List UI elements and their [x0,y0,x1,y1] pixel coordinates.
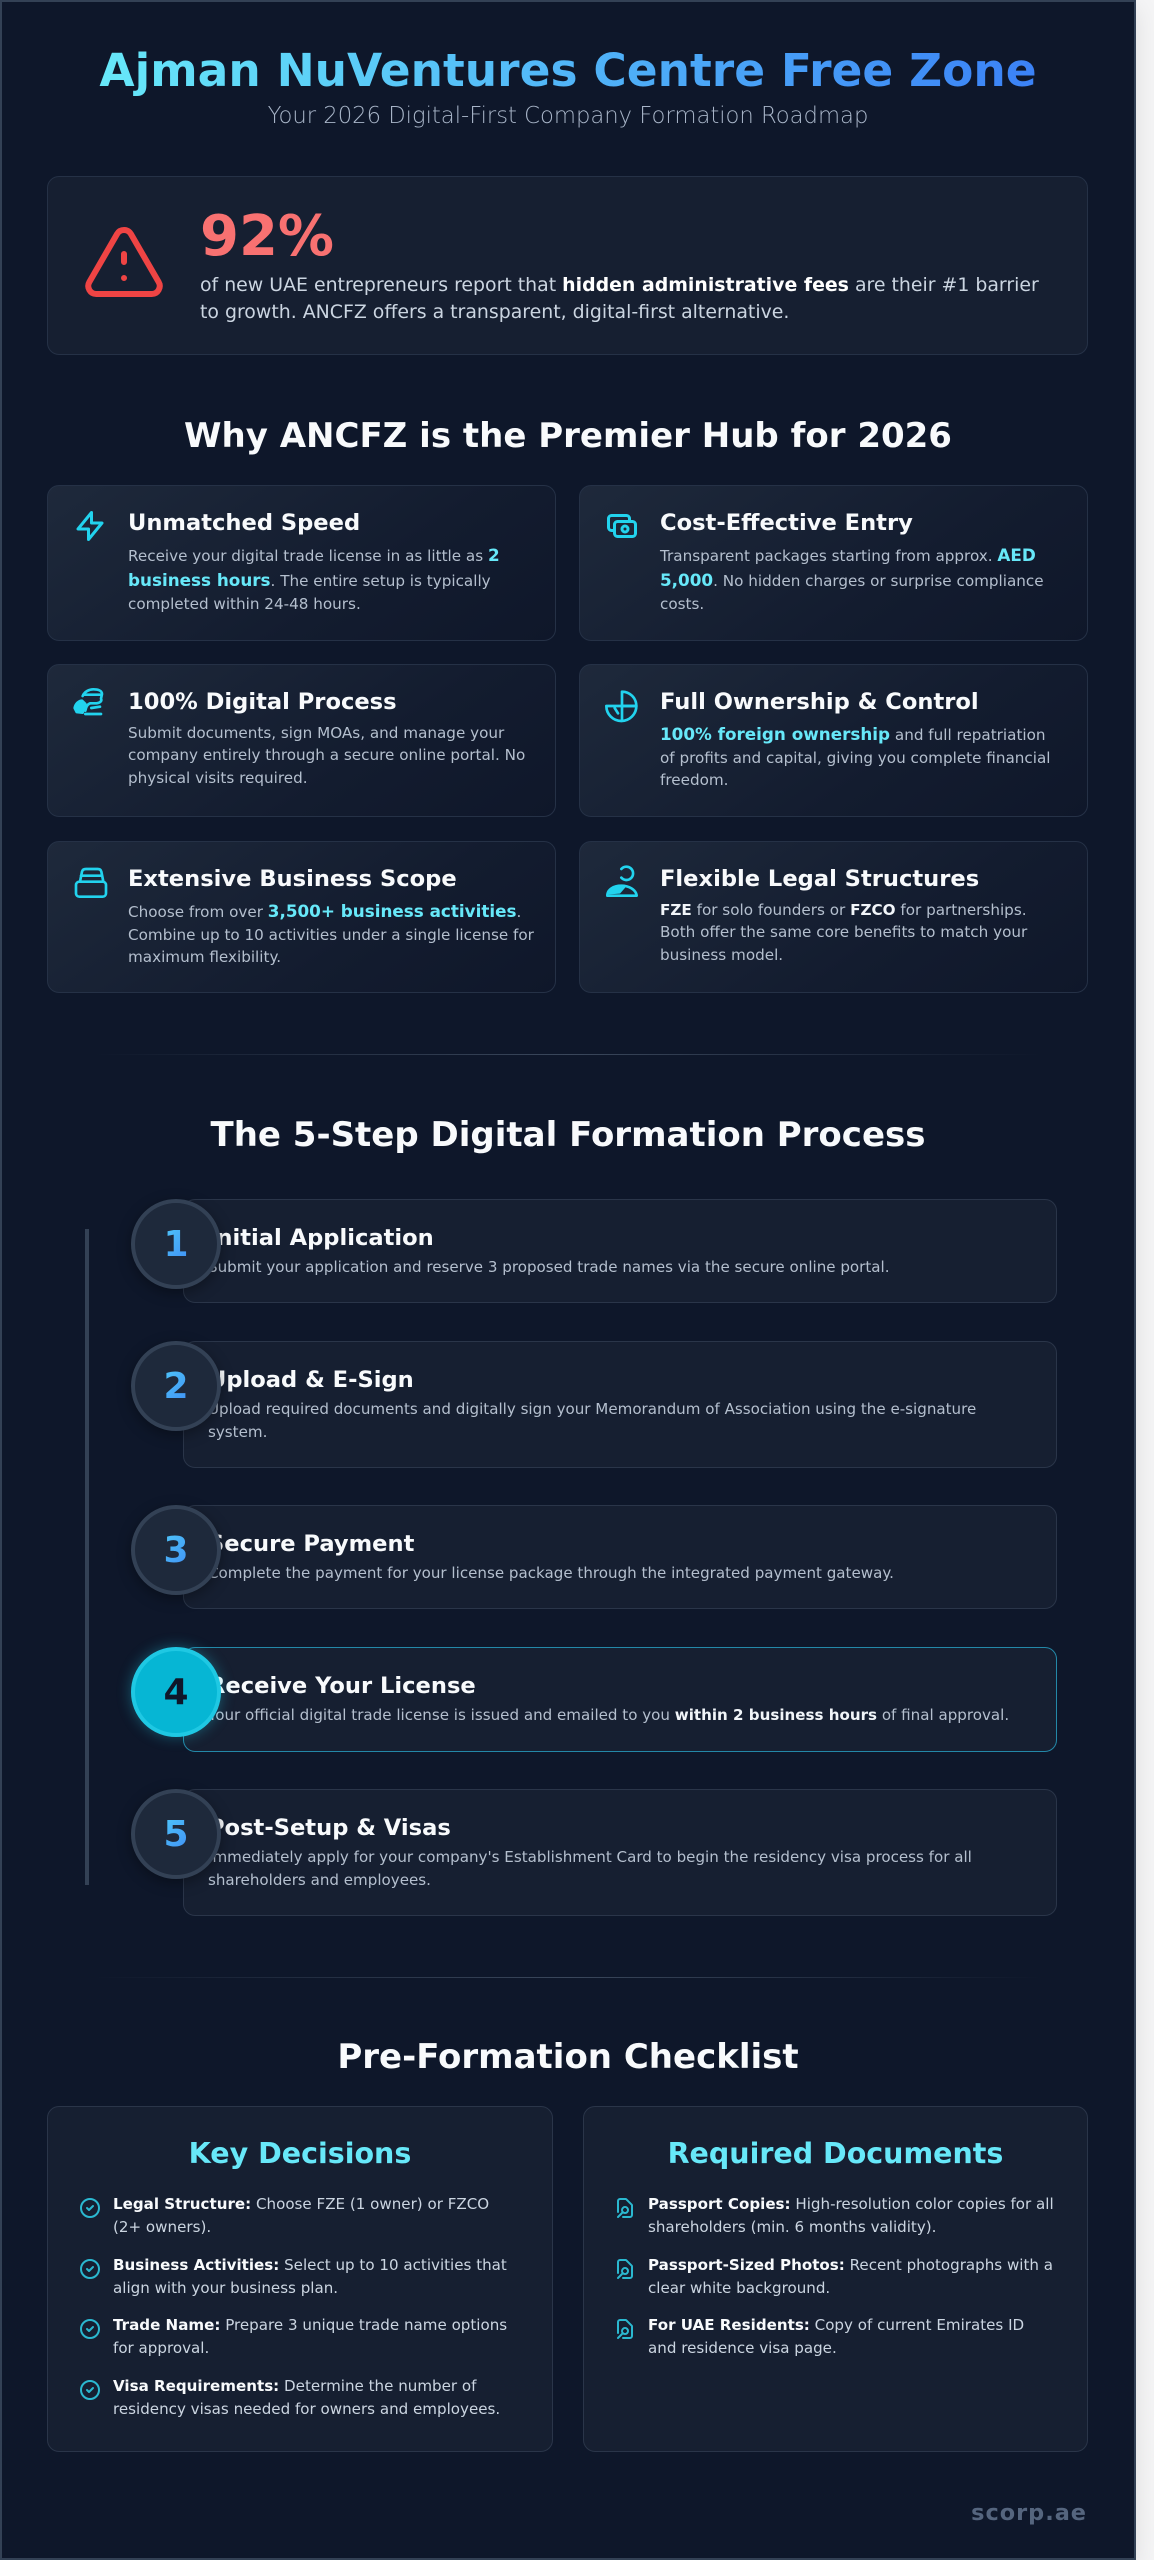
feature text: business hours. The entire setup is typically [128,570,491,590]
step 5 card [183,1789,1057,1916]
step 5 number [131,1789,221,1879]
item: passport photos: Passport-Sized Photos: Recent photographs with a [648,2256,1053,2274]
feature text [660,544,1044,613]
heading: checklist: Pre-Formation Checklist [337,2036,799,2076]
feature text: Receive your digital trade license in as little as 2 [128,544,500,564]
subtitle: Your 2026 Digital-First Company Formation Roadmap [268,102,868,128]
title: Ajman NuVentures Centre Free Zone [99,44,1037,97]
feature title: Cost-Effective Entry [660,510,913,536]
feature text [128,900,534,966]
step title: Initial Application [208,1225,434,1251]
step text: Complete the payment for your license package through the integrated payment gateway. [208,1564,894,1582]
step 2 card [183,1341,1057,1468]
step 5 number: 5 [163,1814,189,1855]
icon: digital process [73,688,104,716]
feature title: Flexible Legal Structures [660,866,979,892]
step 3 number: 3 [163,1530,189,1571]
heading: why ANCFZ: Why ANCFZ is the Premier Hub for 2026 [184,416,952,456]
item: legal structure [80,2195,489,2236]
feature text: Transparent packages starting from approx. AED [660,544,1036,564]
item: UAE residents: and residence visa page. [648,2339,837,2357]
feature card: Flexible Legal Structures [579,841,1088,993]
icon: ownership pie [605,690,638,722]
step 1 number: 1 [163,1224,189,1265]
footer brand: scorp.ae [971,2500,1087,2526]
step text: Upload required documents and digitally sign your Memorandum of Association using the e-signature system. [208,1400,976,1441]
feature text: Combine up to 10 activities under a single license for [128,926,534,944]
feature text: Both offer the same core benefits to match your [660,923,1027,941]
feature text: company entirely through a secure online portal. No [128,746,525,764]
item: trade name: Trade Name: Prepare 3 unique trade name options [113,2316,507,2334]
heading: 5-step process: The 5-Step Digital Formation Process [210,1114,925,1154]
item: business activities: Business Activities: Select up to 10 activities that [113,2256,507,2274]
step text: Immediately apply for your company's Establishment Card to begin the residency visa process for all shareholders and employees. [208,1848,972,1889]
item: passport photos: clear white background. [648,2278,830,2296]
step title: Upload & E-Sign [208,1367,414,1393]
step 2 number: 2 [163,1366,189,1407]
feature text: business model. [660,946,783,964]
panel: required documents [583,2106,1088,2452]
feature text [128,544,500,613]
step title: Receive Your License [208,1673,476,1699]
step text: Submit your application and reserve 3 proposed trade names via the secure online portal. [208,1258,890,1276]
step 1 card [183,1199,1057,1303]
feature text: physical visits required. [128,769,308,787]
item: visa requirements: residency visas needed for owners and employees. [113,2400,500,2418]
feature title: Unmatched Speed [128,510,360,536]
item: UAE residents: For UAE Residents: Copy of current Emirates ID [648,2316,1024,2334]
item: business activities: align with your business plan. [113,2278,338,2296]
item: passport photos [617,2256,1053,2296]
step 4 number (highlighted): 4 [163,1672,189,1713]
panel: key decisions [47,2106,553,2452]
item: passport copies [617,2195,1054,2236]
item: trade name: for approval. [113,2339,209,2357]
feature text: Choose from over 3,500+ business activities. [128,900,521,920]
icon: lightning bolt [76,511,104,541]
step text: Your official digital trade license is issued and emailed to you within 2 business hours of final approval. [208,1706,1009,1724]
item: legal structure: Legal Structure: Choose FZE (1 owner) or FZCO [113,2195,489,2213]
statistic text: to growth. ANCFZ offers a transparent, digital-first alternative. [200,300,789,322]
step 3 number [131,1505,221,1595]
feature title: Full Ownership & Control [660,689,979,715]
feature text: maximum flexibility. [128,948,281,966]
feature text: freedom. [660,771,728,789]
panel: 92% statistic [47,176,1088,355]
feature text: Submit documents, sign MOAs, and manage your [128,724,504,742]
item: business activities [80,2256,507,2296]
step 2 number [131,1341,221,1431]
statistic text [200,274,1039,322]
feature title: 100% Digital Process [128,689,397,715]
feature text: of profits and capital, giving you complete financial [660,749,1051,767]
feature text [660,900,1028,964]
step 3 card [183,1505,1057,1609]
feature text: FZE for solo founders or FZCO for partnerships. [660,900,1027,918]
step title: Secure Payment [208,1531,414,1557]
item: trade name [80,2316,507,2357]
timeline line [85,1229,89,1885]
feature text: completed within 24-48 hours. [128,595,361,613]
statistic number: 92% [200,204,334,269]
panel heading: Required Documents [668,2137,1003,2170]
feature card: Unmatched Speed [47,485,556,641]
feature card: Extensive Business Scope [47,841,556,993]
icon: person [606,865,638,897]
icon: cash [607,514,637,538]
step 4 number (highlighted) [131,1647,221,1737]
feature card: Full Ownership & Control [579,664,1088,817]
item: passport copies: shareholders (min. 6 months validity). [648,2218,936,2236]
feature title: Extensive Business Scope [128,866,457,892]
icon: warning triangle [85,227,163,297]
step title: Post-Setup & Visas [208,1815,451,1841]
feature text: 5,000. No hidden charges or surprise compliance [660,570,1044,590]
feature text: 100% foreign ownership and full repatriation [660,724,1046,744]
feature card: 100% Digital Process [47,664,556,817]
feature text: costs. [660,595,704,613]
statistic text: of new UAE entrepreneurs report that hidden administrative fees are their #1 barrier [200,274,1039,296]
feature text [660,724,1051,789]
icon: stacked box [74,868,108,898]
item: UAE residents [617,2316,1024,2357]
feature text [128,724,525,787]
feature card: Cost-Effective Entry [579,485,1088,641]
step 4 card (highlighted) [183,1647,1057,1752]
panel heading: Key Decisions [189,2137,411,2170]
item: visa requirements: Visa Requirements: Determine the number of [113,2376,476,2394]
step 1 number [131,1199,221,1289]
item: passport copies: Passport Copies: High-resolution color copies for all [648,2195,1054,2213]
item: visa requirements [80,2376,500,2418]
item: legal structure: (2+ owners). [113,2218,211,2236]
